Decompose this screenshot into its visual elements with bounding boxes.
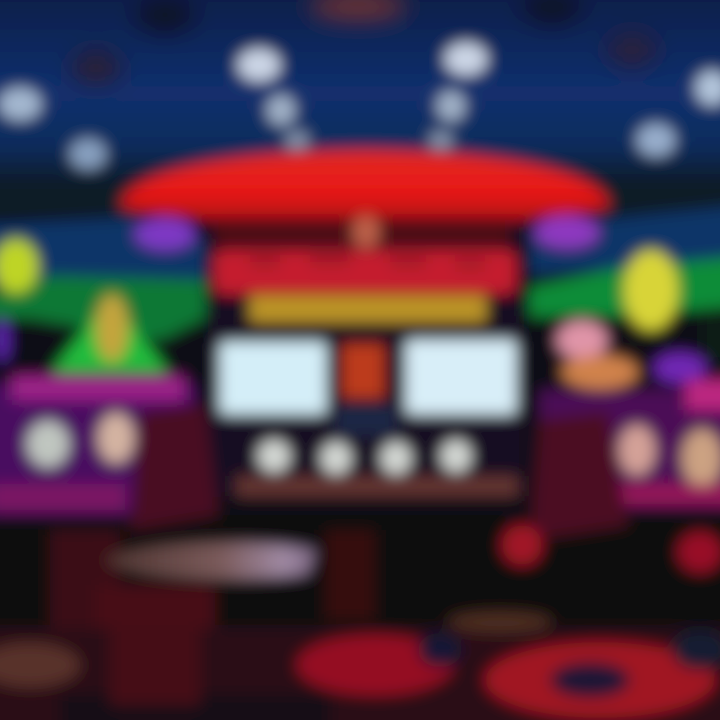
table base: [95, 585, 215, 695]
stools: [50, 530, 120, 630]
central machine: [120, 150, 610, 497]
right side wall: [530, 205, 720, 389]
purple edge light: [0, 318, 9, 362]
ceiling: [0, 0, 720, 215]
gold strip: [250, 296, 486, 322]
center red panel: [342, 344, 384, 398]
yellow lamp left: [0, 239, 38, 293]
marquee mottling: [250, 256, 485, 268]
buttons: [258, 440, 471, 474]
left side wall: [0, 218, 205, 372]
dark red canopy underside: [215, 218, 510, 246]
green band right: [530, 256, 720, 316]
ceiling lights: [0, 43, 720, 169]
canopy ornament: [352, 216, 380, 248]
wooden ledge: [236, 476, 518, 496]
machine body: [208, 215, 524, 497]
green lamp: [52, 296, 168, 372]
left screen: [220, 342, 326, 414]
left slot machines: [0, 376, 195, 518]
purple canopy tips: [135, 218, 195, 250]
left chair: [130, 404, 218, 530]
red marquee: [214, 250, 516, 294]
yellow lamp right: [624, 250, 678, 330]
peach lamp right: [557, 321, 607, 359]
floor zone: [0, 404, 720, 695]
right slot machines: [540, 353, 720, 508]
center lower panel: [335, 404, 397, 436]
table top: [104, 543, 316, 579]
red canopy: [120, 150, 610, 220]
green band left: [0, 276, 205, 340]
dark ceiling spots: [72, 0, 656, 84]
carpet: [0, 612, 720, 720]
red glows: [502, 525, 542, 565]
right chair: [530, 412, 628, 540]
right screen: [406, 340, 516, 414]
